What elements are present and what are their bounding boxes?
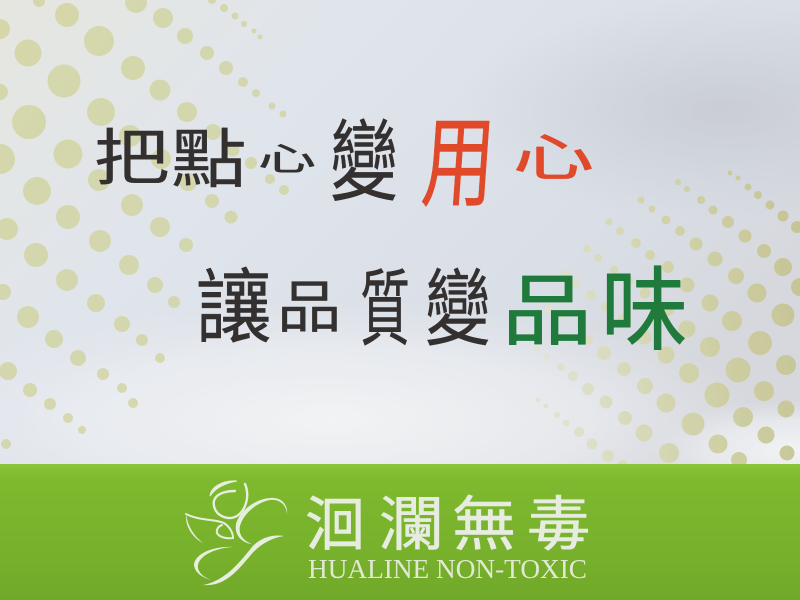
heading line 1: 把點心變用心: 用	[418, 109, 498, 220]
heading line 1: 把點心變用心: 心	[513, 130, 594, 186]
dot pattern: upper left	[0, 0, 289, 449]
brand name: 洄瀾無毒: 洄	[305, 491, 365, 558]
heading line 2: 讓品質變品味: 變	[425, 263, 490, 356]
heading line 2: 讓品質變品味: 質	[360, 263, 410, 356]
brand name: 洄瀾無毒	[305, 491, 590, 558]
brand name: 洄瀾無毒: 無	[452, 492, 516, 558]
brand name: 洄瀾無毒: 瀾	[379, 492, 443, 558]
heading line 2: 讓品質變品味: 味	[601, 260, 688, 361]
heading line 2: 讓品質變品味: 讓	[196, 263, 271, 354]
heading line 1: 把點心變用心: 變	[330, 114, 398, 212]
heading line 1: 把點心變用心: 心	[258, 141, 316, 177]
heading line 2: 讓品質變品味: 品	[502, 268, 592, 355]
brand name: 洄瀾無毒: 毒	[527, 492, 590, 558]
green brand band	[0, 464, 800, 600]
icon: brand flower logo	[186, 481, 287, 585]
heading line 1: 把點心變用心: 點	[171, 123, 247, 196]
dot pattern: lower right	[534, 170, 800, 470]
heading line 2: 讓品質變品味: 品	[277, 276, 341, 339]
heading line 1: 把點心變用心	[94, 109, 594, 220]
brand name English: HUALINE NON-TOXIC	[308, 554, 587, 584]
heading line 2: 讓品質變品味	[196, 260, 688, 361]
heading line 1: 把點心變用心: 把	[94, 124, 169, 192]
